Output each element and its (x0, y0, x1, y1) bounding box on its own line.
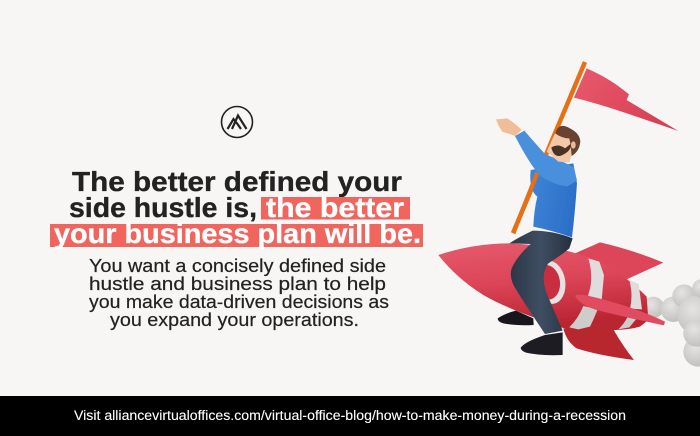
pole (513, 62, 585, 233)
heading highlight text 1: the better (266, 192, 404, 223)
flag (574, 68, 678, 131)
ear (571, 141, 576, 149)
shirt (530, 163, 577, 237)
bottom fin (563, 328, 634, 360)
porthole (533, 259, 568, 306)
body line 3: you make data-driven decisions as (89, 292, 389, 312)
heading line 2: side hustle is, (69, 192, 257, 223)
far shoe (498, 311, 534, 325)
rocket body (438, 243, 648, 330)
neck and face (547, 133, 573, 163)
head (547, 126, 580, 163)
rocket (438, 242, 665, 360)
stripes (587, 258, 604, 300)
heading highlight text 2: your business plan will be. (54, 218, 421, 249)
body line 4: you expand your operations. (110, 310, 359, 330)
smoke (643, 279, 700, 367)
footer text: Visit alliancevirtualoffices.com/virtual-office-blog/how-to-make-money-during-a-recession (74, 408, 626, 423)
heading (50, 166, 423, 249)
top fin (575, 242, 663, 279)
illustration: rocket and rider (438, 62, 700, 367)
side fin (575, 295, 665, 325)
hand (496, 118, 522, 136)
pole in front of shirt (513, 173, 537, 233)
far leg and shoes (498, 231, 573, 355)
body text (89, 256, 389, 330)
arm (515, 131, 577, 186)
icon: logo (222, 106, 252, 138)
pants (509, 231, 573, 334)
beard (551, 143, 571, 156)
footer bar (0, 396, 700, 436)
body line 2: hustle and business plan to help (89, 274, 386, 294)
highlight: your business plan (50, 224, 423, 247)
body line 1: You want a concisely defined side (89, 256, 386, 276)
near shoe (521, 332, 563, 355)
rider upper body (496, 118, 580, 237)
hair (555, 126, 580, 156)
heading line 1: The better defined your (72, 166, 402, 197)
highlight: the better (261, 197, 410, 220)
